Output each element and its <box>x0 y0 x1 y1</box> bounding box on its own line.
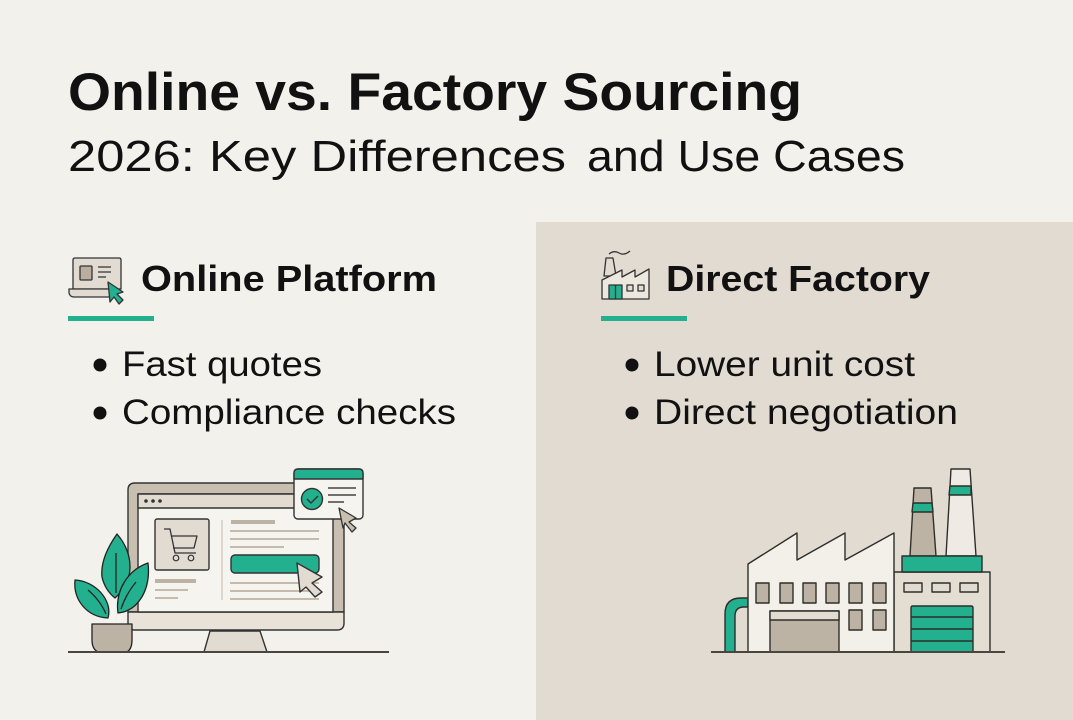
title: Online vs. Factory Sourcing <box>68 63 802 122</box>
right chimney <box>946 469 976 556</box>
hall door <box>770 611 839 652</box>
subtitle: 2026: Key Differences <box>68 132 566 181</box>
panel: direct factory background <box>536 222 1073 720</box>
accent rule: direct factory <box>601 316 687 321</box>
hall windows <box>756 583 886 630</box>
green pipe <box>725 598 748 652</box>
icon: laptop with cursor <box>69 258 123 304</box>
monitor stand <box>204 631 267 652</box>
subtitle <box>68 132 905 181</box>
heading: direct factory: Direct Factory <box>666 258 930 299</box>
subtitle: and Use Cases <box>587 132 905 181</box>
accent rule: online platform <box>68 316 154 321</box>
cart tile <box>155 519 209 570</box>
heading: online platform: Online Platform <box>141 258 437 299</box>
ground line: computer <box>68 651 389 653</box>
monitor chin <box>128 612 344 630</box>
screen text lines <box>155 520 319 600</box>
plant <box>75 534 148 652</box>
main hall <box>748 533 894 652</box>
green button <box>231 555 319 573</box>
list: direct factory benefits <box>626 345 958 432</box>
popup card <box>294 469 363 532</box>
list: online platform benefits: Fast quotes <box>122 345 322 384</box>
cursor <box>297 563 322 597</box>
right block <box>894 572 990 652</box>
ground line: factory <box>711 651 1005 653</box>
list: online platform benefits <box>94 345 456 432</box>
list: direct factory benefits: Direct negotiation <box>654 393 958 432</box>
icon: factory small <box>602 251 649 299</box>
green roller door <box>911 606 973 652</box>
left chimney <box>910 488 936 556</box>
monitor frame <box>128 483 344 612</box>
block windows <box>904 583 978 592</box>
list: direct factory benefits: Lower unit cost <box>654 345 915 384</box>
screen <box>138 494 333 612</box>
list: online platform benefits: Compliance checks <box>122 393 456 432</box>
illustration: factory <box>725 469 990 652</box>
illustration: computer with plant <box>75 469 363 652</box>
